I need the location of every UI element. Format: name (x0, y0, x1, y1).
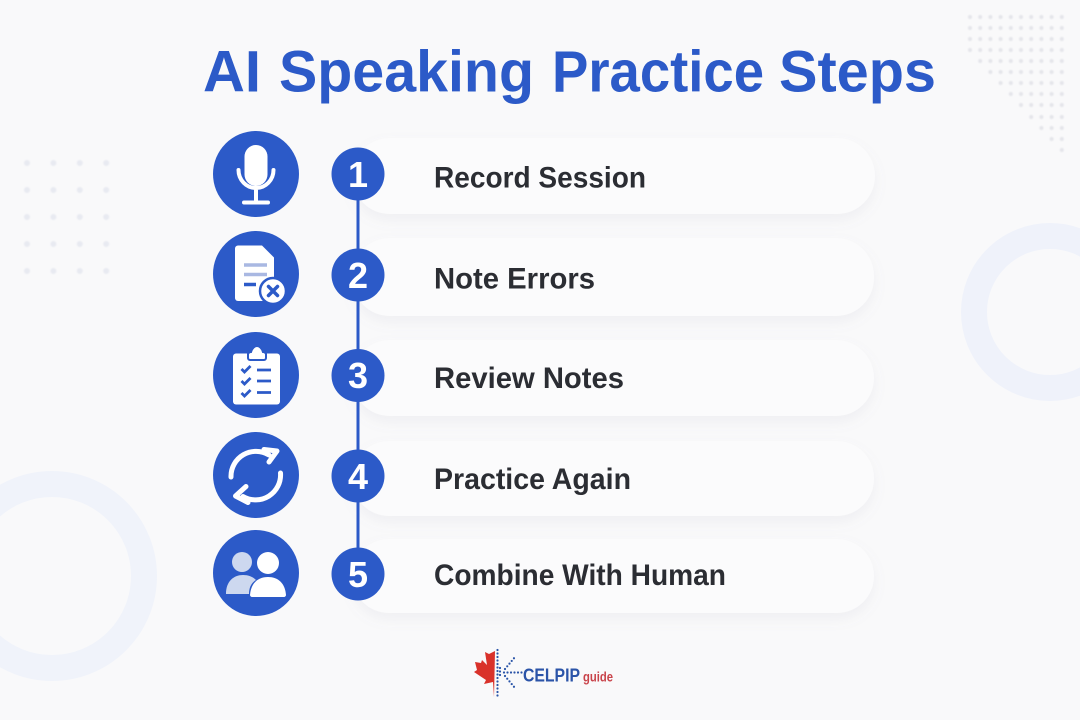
step 5 card (352, 539, 874, 613)
icon: two people (213, 530, 299, 616)
decorative ring left (0, 484, 144, 668)
step 1 card: Record Session (434, 162, 646, 194)
number badge 1 (332, 148, 384, 200)
number badge 3 (332, 349, 384, 402)
dot pattern top right (970, 17, 1064, 150)
number badge 3: 3 (348, 355, 368, 396)
number badge 2: 2 (348, 255, 368, 296)
dot pattern left (27, 163, 110, 271)
title: Practice (552, 40, 764, 104)
decorative ring right (974, 236, 1080, 388)
step 2 card (352, 238, 874, 316)
logo wordmark: CELPIP (523, 666, 580, 686)
step 1 card (352, 138, 875, 214)
logo dots (498, 650, 522, 697)
number badge 5: 5 (348, 554, 368, 595)
title: AI (203, 40, 261, 104)
step 2 card: Note Errors (434, 262, 595, 296)
number badge 4: 4 (348, 456, 368, 497)
title: Steps (779, 40, 936, 104)
title (203, 40, 936, 104)
step 4 card: Practice Again (434, 463, 631, 496)
number badge 2 (332, 248, 384, 302)
number badge 1: 1 (348, 154, 368, 195)
title: Speaking (279, 40, 534, 104)
logo suffix: guide (583, 668, 613, 684)
number badge 4 (332, 450, 384, 502)
step 5 card: Combine With Human (434, 559, 726, 592)
icon: checklist clipboard (213, 332, 299, 418)
step 3 card (352, 340, 874, 416)
step 4 card (352, 441, 874, 516)
logo maple leaf (474, 651, 495, 697)
logo: CELPIP guide (474, 650, 613, 697)
timeline connector (356, 180, 360, 570)
step 3 card: Review Notes (434, 362, 624, 395)
number badge 5 (332, 548, 384, 600)
icon: document with error mark (213, 231, 299, 317)
icon: microphone (213, 131, 299, 217)
icon: refresh arrows (213, 432, 299, 518)
